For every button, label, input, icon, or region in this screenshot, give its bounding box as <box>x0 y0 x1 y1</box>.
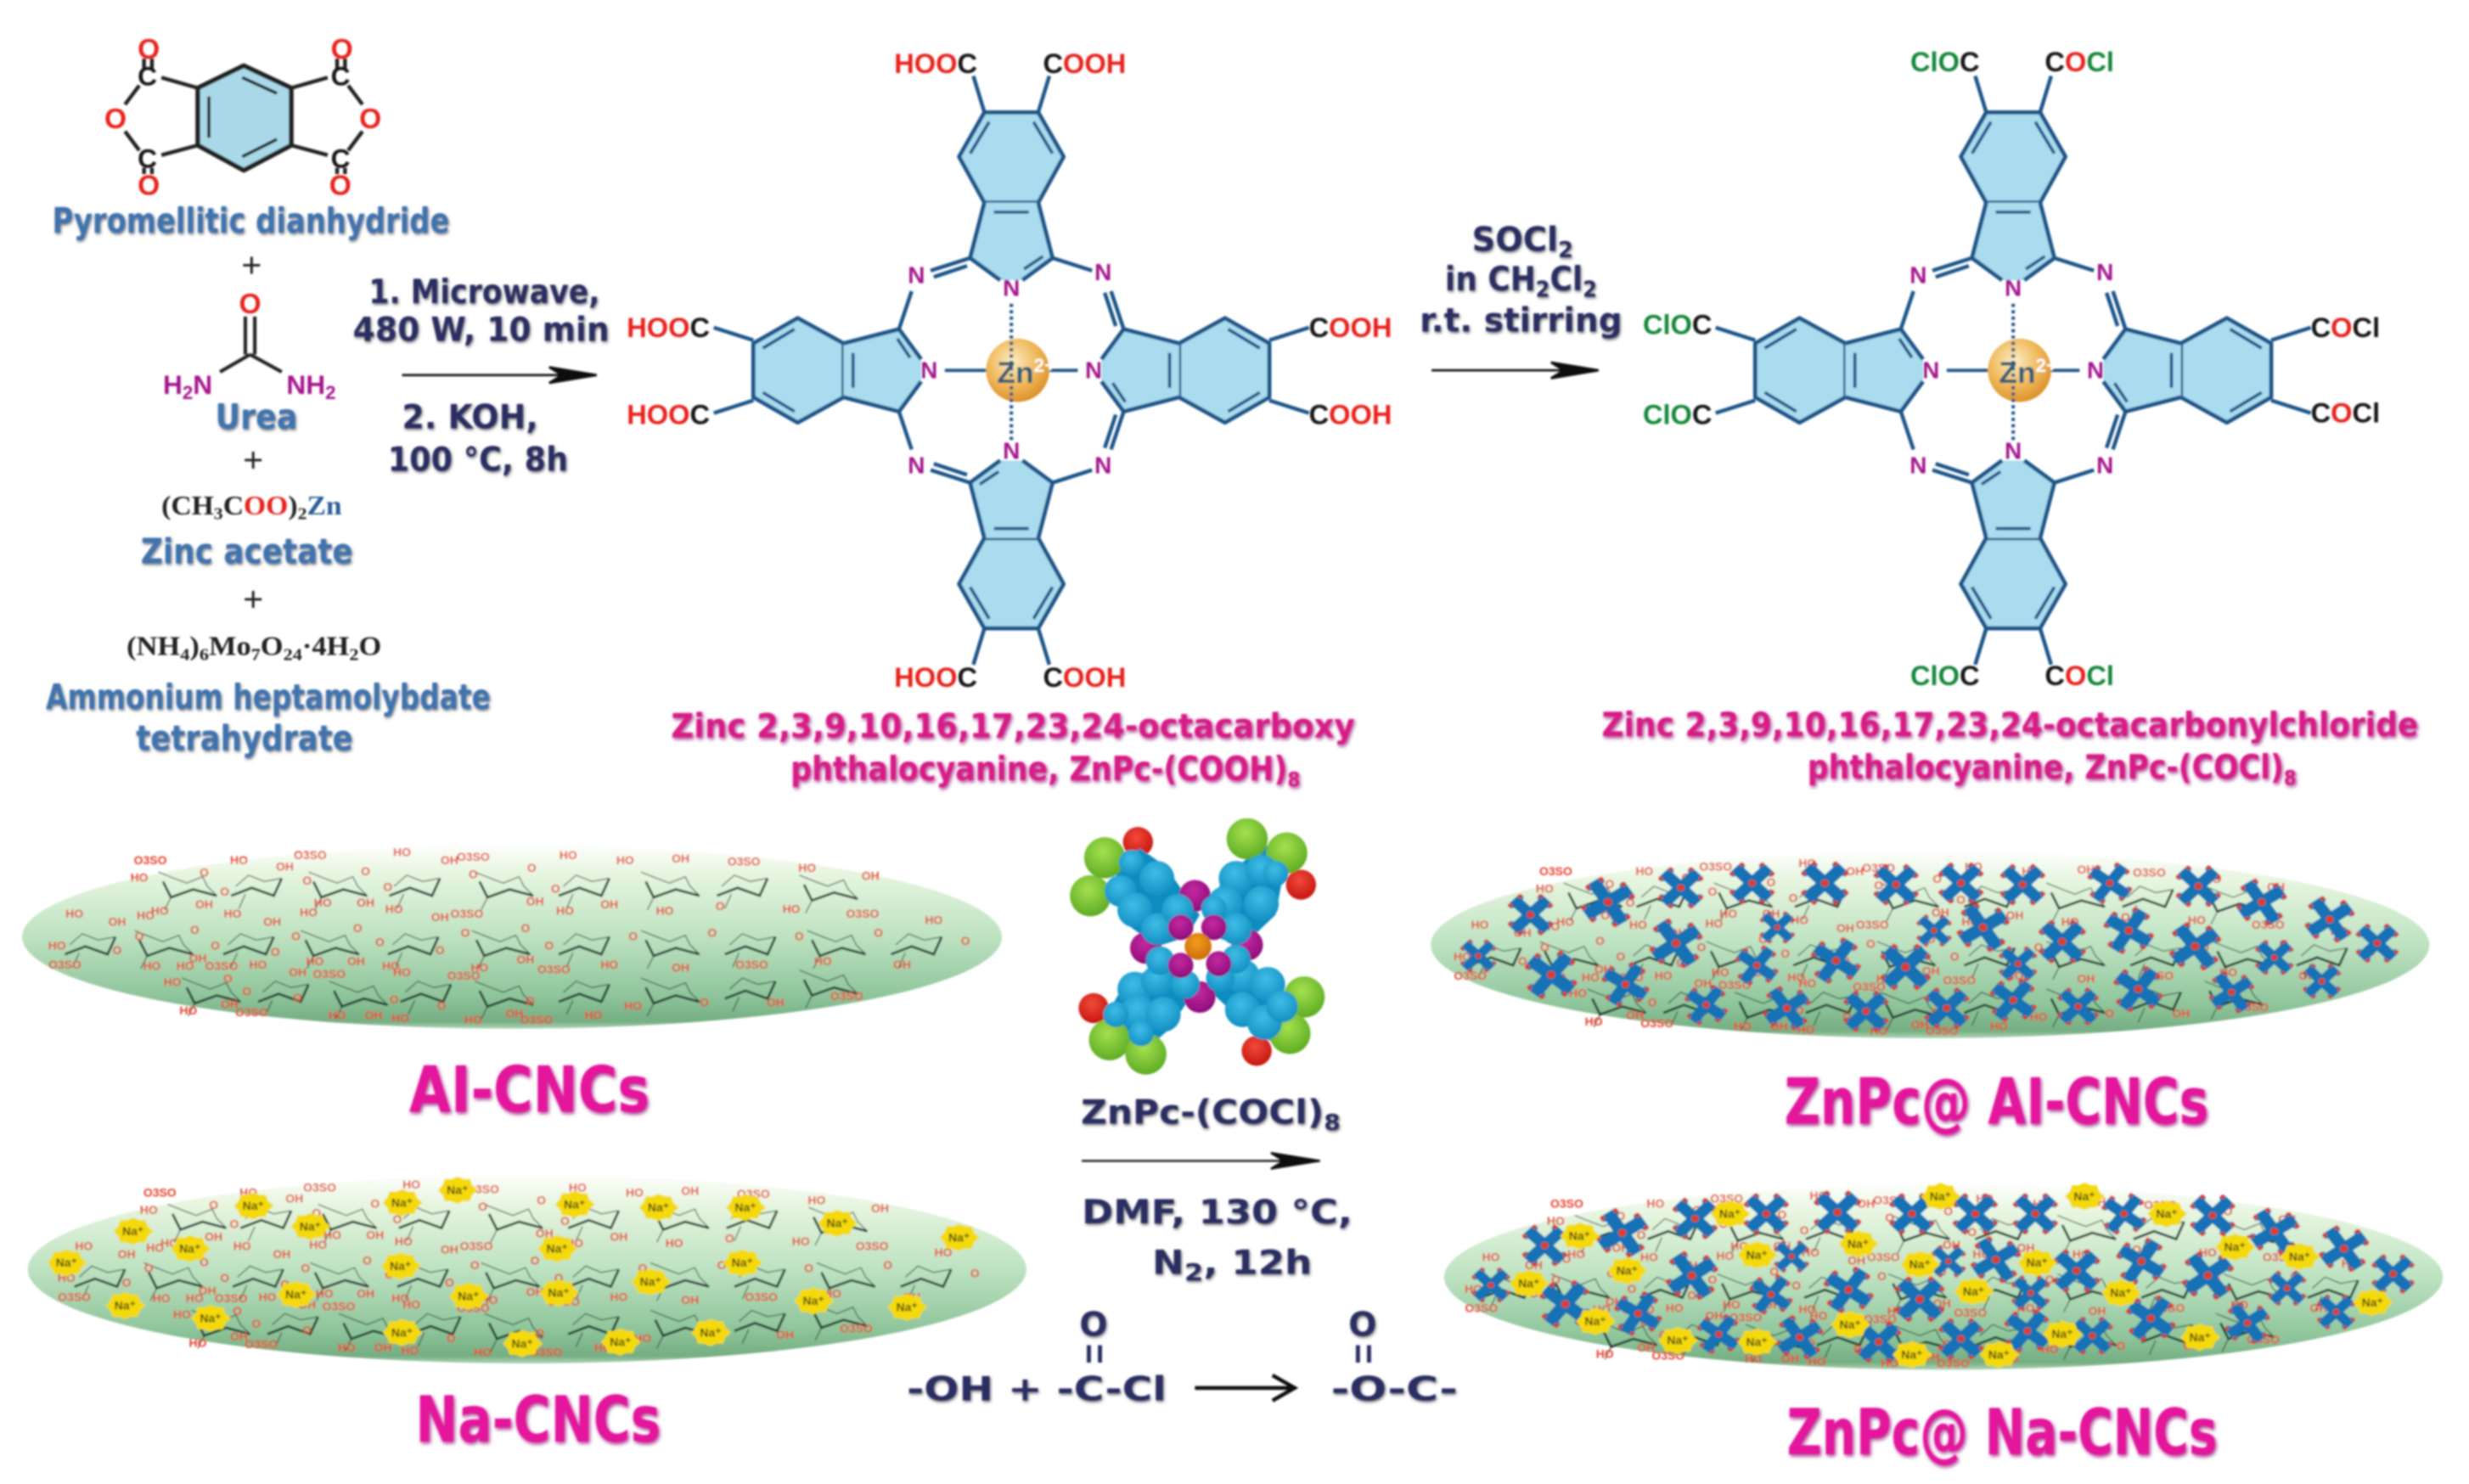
plus sign: + <box>243 441 263 480</box>
arrow: step two <box>1431 363 1599 379</box>
formula: ammonium heptamolybdate: 4 <box>180 645 189 664</box>
caption: ZnPc-(COCl)8: Zinc 2,3,9,10,16,17,23,24-octacarbonylchloride <box>1601 706 2418 745</box>
label: ZnPc-(COCl)8: 8 <box>1324 1110 1341 1136</box>
conditions: DMF, 130 C, N2, 12h <box>1082 1194 1353 1286</box>
molecule: ZnPc-(COCl)8: N <box>2005 438 2022 464</box>
molecule: pyromellitic dianhydride <box>104 34 381 201</box>
formula: ammonium heptamolybdate: O <box>358 632 381 661</box>
conditions: DMF, 130 C, N2, 12h: 2 <box>1184 1258 1203 1286</box>
conditions: SOCl2 step: SOCl <box>1472 221 1560 259</box>
molecule: ZnPc-(COCl)8: N <box>1909 452 1926 478</box>
molecule: urea: H <box>163 369 183 400</box>
molecule: ZnPc-(COOH)8: HOOC <box>627 399 710 430</box>
molecule: ZnPc-(COOH)8: N <box>908 452 925 478</box>
plus sign: + <box>241 245 262 284</box>
formula: zinc acetate: Zn <box>307 491 342 520</box>
molecule: ZnPc-(COOH)8: HOOC <box>627 312 710 343</box>
conditions: SOCl2 step: in CH <box>1445 261 1544 299</box>
equation: acyl chloride esterification: O <box>1348 1306 1376 1344</box>
plus sign: + <box>243 580 263 619</box>
label: zinc acetate: Zinc acetate <box>141 531 353 572</box>
label: urea: Urea <box>216 396 297 437</box>
equation: acyl chloride esterification <box>907 1306 1458 1409</box>
caption: ZnPc-(COOH)8 <box>671 708 1355 791</box>
molecule: ZnPc-(COCl)8: COCl <box>2311 397 2380 429</box>
molecule: urea: O <box>239 289 262 320</box>
formula: ammonium heptamolybdate: ) <box>189 632 200 661</box>
panel: Na-CNCs nanocrystal <box>28 1175 1026 1363</box>
label: Na-CNCs: Na-CNCs <box>415 1383 661 1457</box>
molecule: ZnPc-(COOH)8: N <box>908 262 925 289</box>
formula: ammonium heptamolybdate: O <box>261 632 284 661</box>
molecule: ZnPc-(COOH)8: N <box>1094 452 1111 478</box>
formula: ammonium heptamolybdate: ·4H <box>302 632 350 661</box>
label: ammonium heptamolybdate: Ammonium heptamolybdate <box>46 677 491 717</box>
molecule: ZnPc-(COCl)8: N <box>1909 262 1926 289</box>
conditions: microwave and KOH step <box>353 273 610 480</box>
conditions: microwave and KOH step: 100 °C, 8h <box>388 441 568 480</box>
molecule: ZnPc-(COCl)8: ClOC <box>1910 46 1980 77</box>
label: ZnPc@Na-CNCs: ZnPc@ Na-CNCs <box>1787 1396 2218 1470</box>
label: AI-CNCs: AI-CNCs <box>409 1054 650 1127</box>
formula: ammonium heptamolybdate: Mo <box>209 632 251 661</box>
panel: AI-CNCs nanocrystal <box>22 845 1002 1029</box>
molecule: ZnPc-(COOH)8: N <box>1085 357 1102 384</box>
molecule: ZnPc-(COCl)8 <box>1643 46 2380 691</box>
molecule: pyromellitic dianhydride: O <box>331 34 353 65</box>
label: ZnPc-(COCl)8: ZnPc-(COCl) <box>1081 1094 1305 1133</box>
formula: ammonium heptamolybdate: 7 <box>251 645 261 664</box>
formula: zinc acetate: 2 <box>298 504 307 523</box>
conditions: SOCl2 step: 2 <box>1536 278 1549 303</box>
molecule: urea: 2 <box>325 382 336 403</box>
molecule: urea: NH <box>286 369 325 400</box>
caption: ZnPc-(COOH)8: Zinc 2,3,9,10,16,17,23,24-octacarboxy <box>671 708 1355 746</box>
formula: zinc acetate: (CH <box>161 491 211 520</box>
formula: zinc acetate: 3 <box>214 504 223 523</box>
label: pyromellitic dianhydride: Pyromellitic dianhydride <box>53 200 449 241</box>
conditions: DMF, 130 C, N2, 12h: N <box>1152 1245 1180 1283</box>
molecule: ZnPc-(COOH)8: 2+ <box>1034 355 1055 376</box>
molecule: space-filling ZnPc-(COCl)8 <box>1070 818 1324 1075</box>
molecule: ZnPc-(COCl)8: ClOC <box>1643 308 1712 340</box>
molecule: urea <box>163 289 336 403</box>
caption: ZnPc-(COOH)8: 8 <box>1287 767 1300 791</box>
molecule: ZnPc-(COOH)8: N <box>1003 438 1020 464</box>
molecule: pyromellitic dianhydride: O <box>138 34 160 65</box>
molecule: ZnPc-(COCl)8: N <box>2096 259 2113 285</box>
molecule: ZnPc-(COCl)8: COCl <box>2044 660 2114 691</box>
molecule: ZnPc-(COOH)8: HOOC <box>894 48 977 79</box>
conditions: microwave and KOH step: 2. KOH, <box>402 398 538 436</box>
molecule: ZnPc-(COCl)8: N <box>1922 357 1939 384</box>
caption: ZnPc-(COCl)8 <box>1601 706 2418 790</box>
conditions: SOCl2 step: 2 <box>1583 278 1597 303</box>
molecule: ZnPc-(COOH)8: COOH <box>1043 48 1126 79</box>
conditions: DMF, 130 C, N2, 12h: DMF, 130 °C, <box>1082 1194 1353 1232</box>
arrow: step one <box>402 367 597 383</box>
molecule: ZnPc-(COOH)8 <box>627 48 1392 693</box>
conditions: SOCl2 step: Cl <box>1549 261 1583 299</box>
molecule: ZnPc-(COCl)8: Zn <box>1999 356 2036 390</box>
molecule: ZnPc-(COCl)8: COCl <box>2044 46 2114 77</box>
molecule: ZnPc-(COOH)8: N <box>1003 275 1020 301</box>
molecule: pyromellitic dianhydride: C <box>331 61 350 92</box>
molecule: ZnPc-(COOH)8: N <box>1094 259 1111 285</box>
panel: ZnPc@AI-CNCs nanocrystal <box>1431 852 2429 1038</box>
equation: acyl chloride esterification: -OH + -C-Cl <box>907 1371 1167 1409</box>
molecule: ZnPc-(COCl)8: N <box>2005 275 2022 301</box>
equation: acyl chloride esterification: O <box>1079 1306 1108 1344</box>
conditions: DMF, 130 C, N2, 12h: , 12h <box>1203 1245 1312 1283</box>
conditions: microwave and KOH step: 1. Microwave, <box>368 273 599 312</box>
molecule: ZnPc-(COOH)8: COOH <box>1309 312 1392 343</box>
molecule: pyromellitic dianhydride: C <box>331 143 350 174</box>
molecule: pyromellitic dianhydride: C <box>138 143 157 174</box>
formula: ammonium heptamolybdate: 2 <box>349 645 358 664</box>
molecule: ZnPc-(COCl)8: ClOC <box>1643 399 1712 430</box>
conditions: SOCl2 step: 2 <box>1558 238 1573 263</box>
formula: zinc acetate: OO) <box>244 491 297 520</box>
molecule: ZnPc-(COCl)8: ClOC <box>1910 660 1980 691</box>
conditions: SOCl2 step <box>1420 221 1623 340</box>
caption: ZnPc-(COOH)8: phthalocyanine, ZnPc-(COOH) <box>790 750 1348 789</box>
molecule: pyromellitic dianhydride: O <box>359 104 381 135</box>
molecule: ZnPc-(COOH)8: N <box>920 357 937 384</box>
panel: reactants column <box>46 34 491 759</box>
equation: acyl chloride esterification: -O-C- <box>1331 1371 1458 1409</box>
molecule: ZnPc-(COOH)8: HOOC <box>894 661 977 693</box>
molecule: pyromellitic dianhydride: O <box>329 170 352 201</box>
formula: zinc acetate: C <box>223 491 244 520</box>
formula: ammonium heptamolybdate: (NH <box>127 632 176 661</box>
panel: ZnPc@Na-CNCs nanocrystal <box>1444 1183 2443 1370</box>
conditions: microwave and KOH step: 480 W, 10 min <box>353 312 610 350</box>
arrow: grafting reaction <box>1082 1153 1320 1169</box>
molecule: ZnPc-(COOH)8: Zn <box>997 356 1034 390</box>
label: ZnPc@AI-CNCs: ZnPc@ AI-CNCs <box>1785 1065 2208 1139</box>
molecule: ZnPc-(COCl)8: 2+ <box>2036 355 2057 376</box>
molecule: ZnPc-(COCl)8: COCl <box>2311 312 2380 343</box>
molecule: pyromellitic dianhydride: O <box>104 104 127 135</box>
conditions: SOCl2 step: r.t. stirring <box>1420 302 1623 340</box>
molecule: pyromellitic dianhydride: C <box>138 61 157 92</box>
molecule: urea: N <box>193 369 212 400</box>
caption: ZnPc-(COCl)8: phthalocyanine, ZnPc-(COCl) <box>1808 749 2344 787</box>
formula: ammonium heptamolybdate: 6 <box>200 645 209 664</box>
molecule: ZnPc-(COOH)8: COOH <box>1043 661 1126 693</box>
molecule: ZnPc-(COCl)8: N <box>2096 452 2113 478</box>
formula: ammonium heptamolybdate: 24 <box>284 645 302 664</box>
caption: ZnPc-(COCl)8: 8 <box>2284 767 2297 790</box>
molecule: urea: 2 <box>183 382 193 403</box>
molecule: ZnPc-(COOH)8: COOH <box>1309 399 1392 430</box>
molecule: ZnPc-(COCl)8: N <box>2087 357 2104 384</box>
label: tetrahydrate: tetrahydrate <box>136 718 353 759</box>
molecule: pyromellitic dianhydride: O <box>138 170 160 201</box>
